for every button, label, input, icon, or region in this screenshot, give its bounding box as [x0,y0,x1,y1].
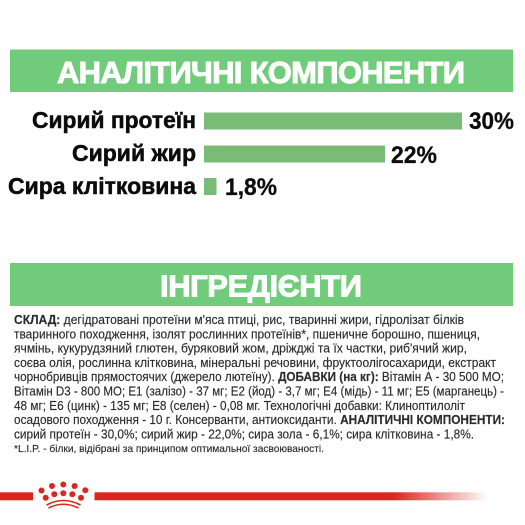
text block: composition: осадового походження - 10 г. Консерванти, антиоксиданти. АНАЛІТИЧНІ КОМПОНЕНТИ: [14,413,505,427]
row: crude protein 30%: 30% [469,108,514,135]
text block: composition: чорнобривців прямостоячих (джерело лютеїну). ДОБАВКИ (на кг): Вітамін А - 30 500 МО; [14,370,504,384]
bar chart: analytical components [8,107,514,201]
text block: composition [14,313,505,455]
row: crude fibre 1.8%: Сира клітковина [8,173,196,199]
panel: analytical components [8,50,514,201]
text block: composition: ячмінь, кукурудзяний глютен, буряковий жом, дріжджі та їх частки, риб'ячий жир, [14,342,467,356]
heading banner: analytical components: АНАЛІТИЧНІ КОМПОНЕНТИ [57,55,465,90]
footer: red stripe with crown logo [0,482,488,508]
text block: composition: 48 мг; Е6 (цинк) - 135 мг; Е8 (селен) - 0,08 мг. Технологічні добавки: Клиноптилоліт [14,399,465,413]
text block: composition: тваринного походження, ізолят рослинних протеїнів*, пшеничне борошно, пшениця, [14,327,480,341]
heading banner: ingredients: ІНГРЕДІЄНТИ [160,268,362,304]
row: crude fibre 1.8%: 1,8% [225,174,277,201]
row: crude fat 22% [72,140,437,169]
row: crude fat 22%: 22% [391,142,437,169]
text block: composition: СКЛАД: дегідратовані протеїни м'яса птиці, рис, тваринні жири, гідролізат білків [14,313,464,327]
row: crude fat 22%: Сирий жир [72,140,196,166]
text block: composition: *L.I.P. - білки, відібрані за принципом оптимальної засвоюваності. [14,443,324,455]
red stripe right, fading [94,492,488,500]
heading banner: analytical components [10,50,513,92]
row: crude fibre 1.8% [8,173,277,201]
red stripe left [0,492,33,500]
panel: ingredients [10,263,513,455]
row: crude protein 30% [32,107,514,135]
text block: composition: сирий протеїн - 30,0%; сирий жир - 22,0%; сира зола - 6,1%; сира клітковина - 1,8%. [14,427,474,441]
heading banner: ingredients [10,263,513,306]
icon: royal crown [38,482,88,508]
text block: composition: соєва олія, рослинна клітковина, мінеральні речовини, фруктоолігосахариди, екстракт [14,356,496,370]
row: crude protein 30%: Сирий протеїн [32,107,196,133]
